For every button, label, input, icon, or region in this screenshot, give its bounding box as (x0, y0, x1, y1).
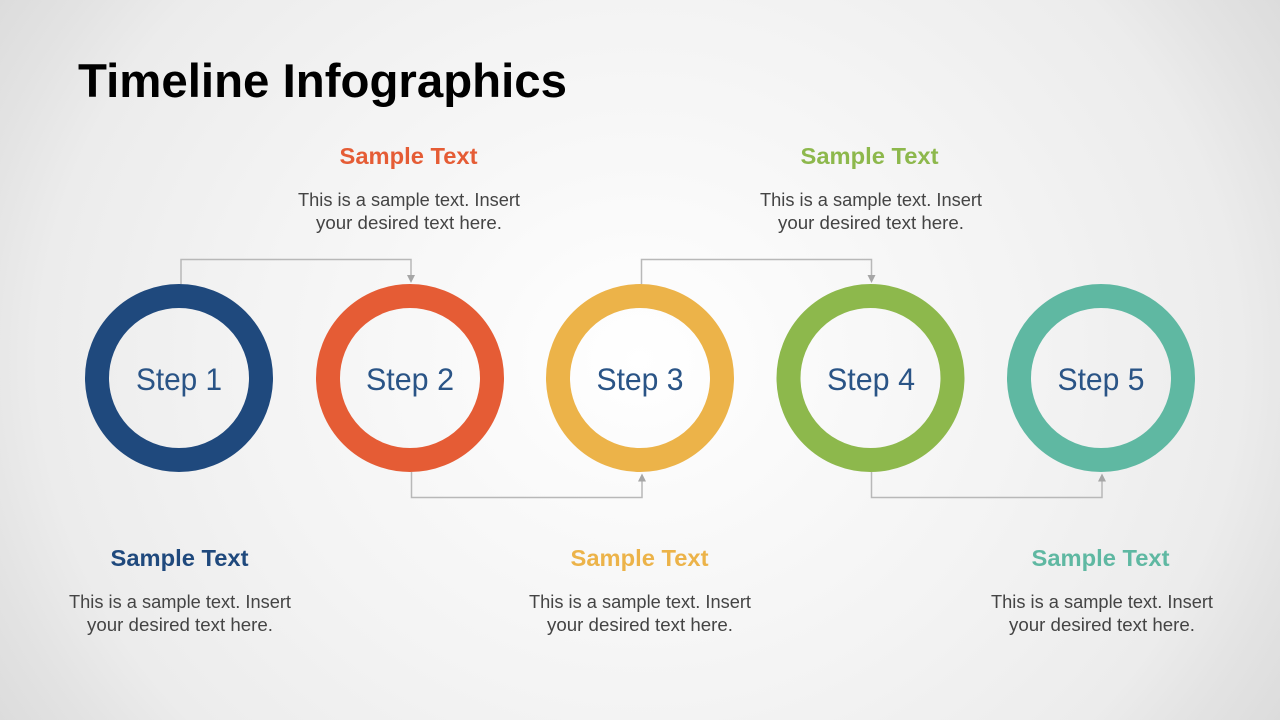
step 2 ring: Step 2 (366, 361, 454, 397)
text block: step 5: your desired text here. (1009, 614, 1195, 635)
text block: step 2: your desired text here. (316, 212, 502, 233)
text block: step 2: This is a sample text. Insert (298, 189, 520, 210)
step 5 ring (1019, 296, 1183, 460)
text block: step 1: your desired text here. (87, 614, 273, 635)
step 4 ring: Step 4 (827, 361, 915, 397)
text block: step 4 (760, 143, 982, 233)
step 3 ring: Step 3 (596, 361, 684, 397)
text block: step 4: This is a sample text. Insert (760, 189, 982, 210)
step 1 ring (97, 296, 261, 460)
text block: step 2 (298, 143, 520, 233)
connector: step 1 to step 2 (181, 260, 415, 284)
connector: step 2 to step 3 (412, 472, 646, 498)
step 2 ring (328, 296, 492, 460)
text block: step 1: Sample Text (110, 545, 249, 571)
text block: step 5: Sample Text (1032, 545, 1170, 571)
connector: step 3 to step 4 (642, 260, 876, 284)
text block: step 5: This is a sample text. Insert (991, 591, 1213, 612)
text block: step 3 (529, 545, 751, 635)
text block: step 2: Sample Text (340, 143, 478, 169)
text block: step 1: This is a sample text. Insert (69, 591, 291, 612)
text block: step 3: your desired text here. (547, 614, 733, 635)
text block: step 5 (991, 545, 1213, 635)
step 5 ring: Step 5 (1058, 361, 1144, 397)
text block: step 4: your desired text here. (778, 212, 964, 233)
text block: step 3: This is a sample text. Insert (529, 591, 751, 612)
step 1 ring: Step 1 (136, 361, 222, 397)
text block: step 4: Sample Text (800, 143, 939, 169)
title: Timeline Infographics (78, 54, 567, 107)
step 3 ring (558, 296, 722, 460)
text block: step 1 (69, 545, 291, 635)
connector: step 4 to step 5 (872, 472, 1106, 498)
text block: step 3: Sample Text (570, 545, 709, 571)
step 4 ring (788, 296, 952, 460)
